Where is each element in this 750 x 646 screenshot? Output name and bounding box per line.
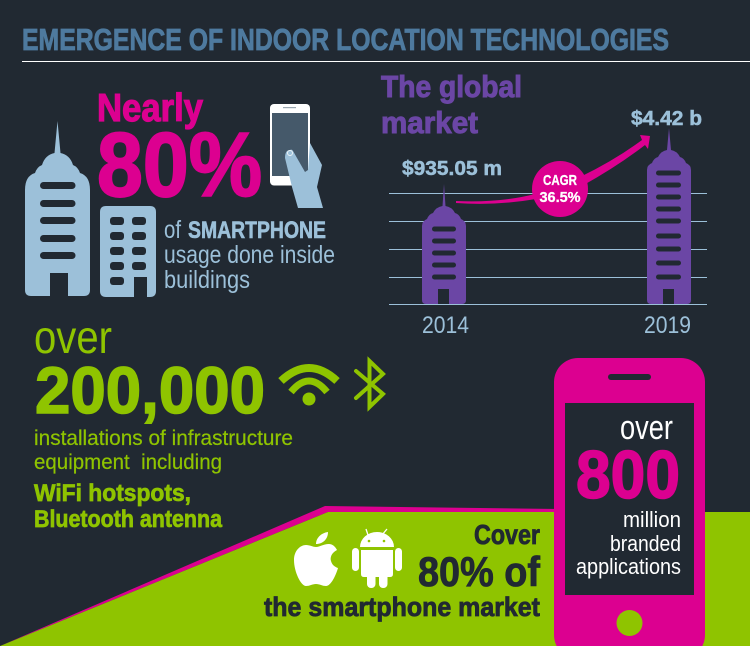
text: million branded applications: applications xyxy=(576,554,681,579)
text: smartphone usage caption xyxy=(164,216,335,294)
text: smartphone usage caption: buildings xyxy=(164,266,250,294)
heading: the global market xyxy=(381,69,522,140)
phone speaker xyxy=(608,374,651,380)
stat: 200,000: 200,000 xyxy=(35,353,265,427)
label: 2019 value: $4.42 b xyxy=(631,108,702,130)
text: smartphone usage caption: usage done inside xyxy=(164,241,335,269)
text: cover 80% of the smartphone market: the smartphone market xyxy=(264,592,540,622)
icon: apple xyxy=(294,532,338,586)
callout: CAGR: CAGR xyxy=(543,173,577,189)
text: cover 80% of the smartphone market: Cover xyxy=(474,519,540,550)
icon: small building xyxy=(100,206,156,297)
callout: CAGR xyxy=(532,161,588,217)
label: 2014 value: $935.05 m xyxy=(402,158,502,180)
text: wifi and bluetooth xyxy=(34,480,223,533)
text: cover 80% of the smartphone market: 80% of xyxy=(418,548,541,595)
text: million branded applications: million xyxy=(623,507,681,532)
text: million branded applications xyxy=(576,507,681,579)
text: smartphone usage caption: SMARTPHONE xyxy=(188,217,326,244)
chart grid lines xyxy=(389,193,707,305)
text: wifi and bluetooth: WiFi hotspots, xyxy=(34,480,191,507)
panel: smartphone usage xyxy=(25,87,335,297)
panel: infrastructure installations xyxy=(34,311,383,533)
phone body xyxy=(554,358,705,646)
heading: the global market: market xyxy=(381,105,478,140)
phone button xyxy=(616,610,642,636)
text: installations description: installations of infrastructure xyxy=(34,427,293,450)
icon: wifi xyxy=(281,368,337,406)
bar: 2014 tower xyxy=(422,184,466,304)
text: smartphone usage caption: of xyxy=(164,216,181,244)
text: wifi and bluetooth: Bluetooth antenna xyxy=(34,506,223,533)
text: over: over xyxy=(34,311,112,363)
stat: 80%: 80% xyxy=(97,115,262,216)
text: million branded applications: branded xyxy=(610,531,681,556)
axis label: 2014: 2014 xyxy=(422,312,469,339)
icon: bluetooth xyxy=(356,361,383,407)
phone screen xyxy=(565,403,694,595)
text: installations description xyxy=(34,427,293,474)
callout: CAGR: 36.5% xyxy=(540,190,581,206)
text: installations description: equipment including xyxy=(34,451,222,474)
icon: android xyxy=(352,529,402,588)
stat: 800: 800 xyxy=(576,437,680,513)
panel: green market band xyxy=(0,506,750,646)
heading: the global market: The global xyxy=(381,69,522,104)
icon: hand holding phone xyxy=(270,104,323,208)
panel: global market chart xyxy=(381,69,707,339)
panel: phone with branded applications xyxy=(554,358,705,646)
arrow: growth xyxy=(456,135,650,204)
text: cover 80% of the smartphone market xyxy=(264,519,541,622)
bar: 2019 tower xyxy=(647,128,691,304)
heading: nearly: Nearly xyxy=(97,87,203,130)
axis label: 2019: 2019 xyxy=(644,312,691,339)
icon: tall building xyxy=(25,121,90,296)
text: over: over xyxy=(620,409,673,447)
